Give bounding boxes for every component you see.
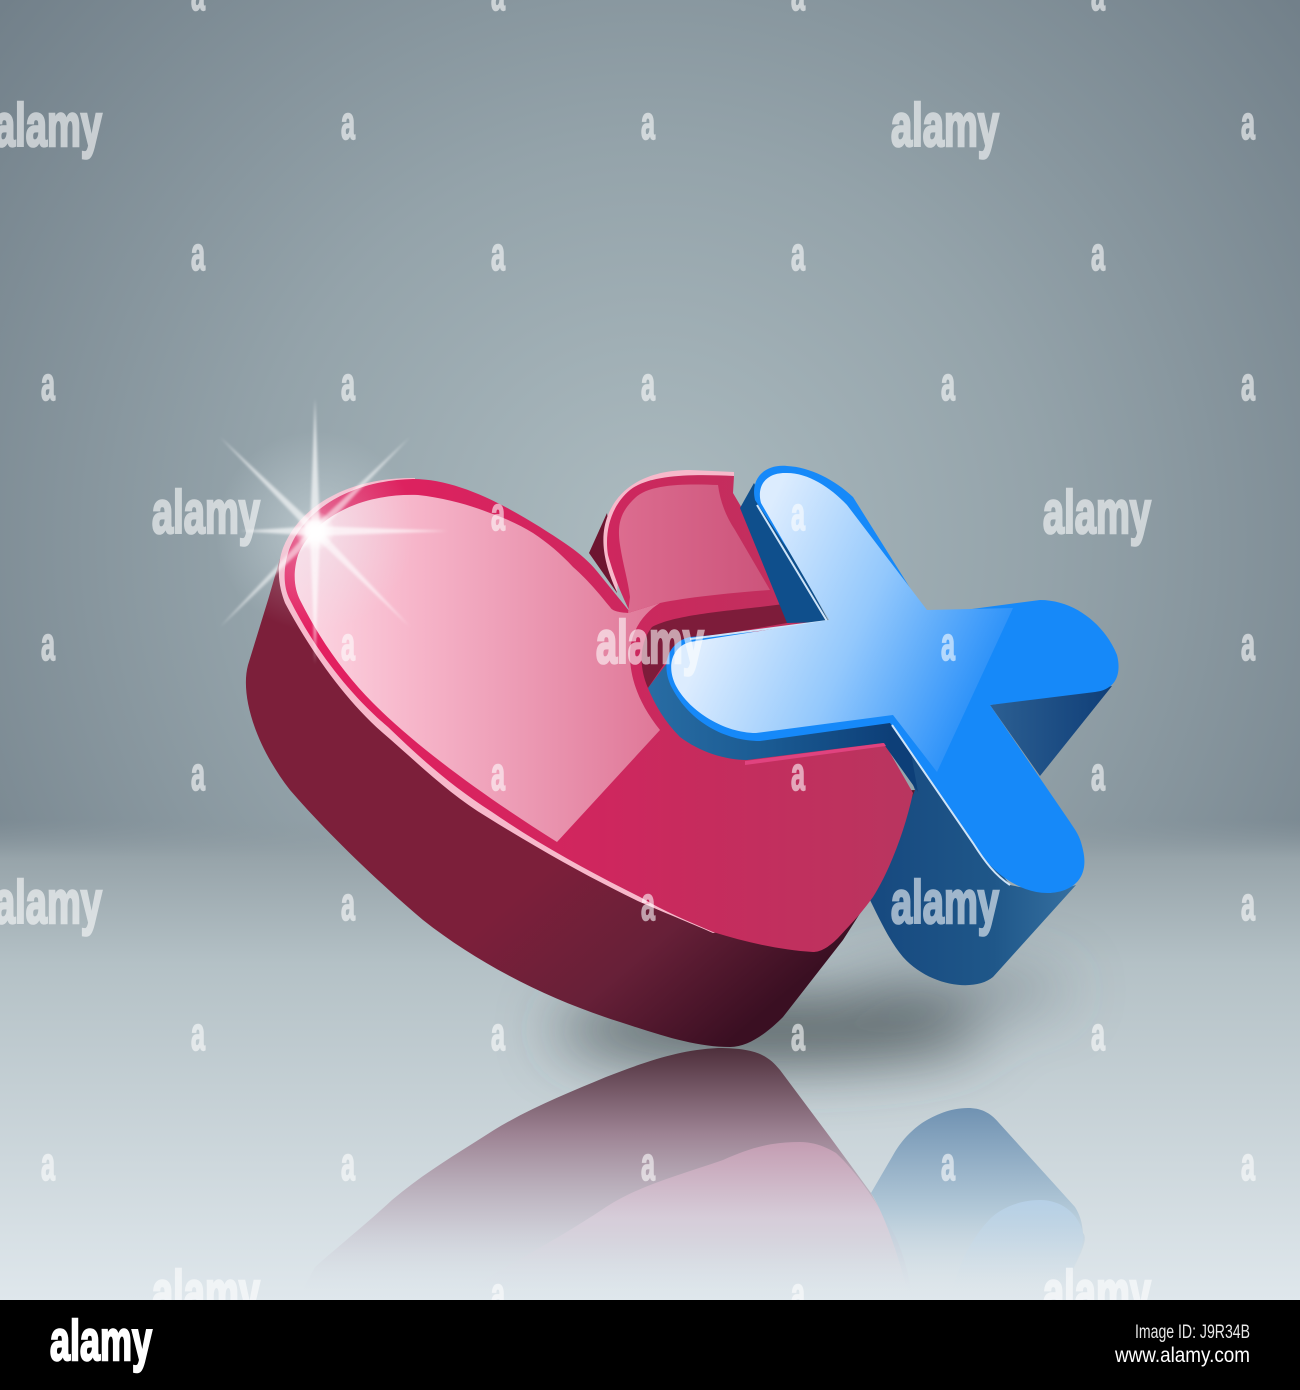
large watermark words: alamy: [891, 92, 999, 159]
small watermark marks: a: [1241, 877, 1255, 930]
small watermark marks: a: [791, 1267, 805, 1320]
small watermark marks: a: [341, 617, 355, 670]
small watermark marks: a: [641, 357, 655, 410]
small watermark marks: a: [341, 357, 355, 410]
small watermark marks: a: [791, 487, 805, 540]
cross back extrusion: [868, 686, 1112, 985]
small watermark marks: a: [1241, 96, 1255, 149]
heart lobe face: [619, 484, 770, 613]
small watermark marks: a: [641, 96, 655, 149]
heart pale rim: [279, 470, 734, 933]
large watermark words: alamy: [152, 479, 260, 546]
small watermark marks: a: [491, 1267, 505, 1320]
small watermark marks: a: [791, 227, 805, 280]
cross top face base: [666, 466, 1119, 893]
cross left arm side wall: [648, 663, 918, 792]
large watermark words: alamy: [1043, 1259, 1151, 1326]
contact shadow: [555, 970, 1070, 1062]
small watermark marks: a: [41, 357, 55, 410]
large watermark words: alamy: [1043, 479, 1151, 546]
small watermark marks: a: [341, 1137, 355, 1190]
small watermark marks: a: [491, 747, 505, 800]
cross right wedge wall: [990, 686, 1112, 776]
pink edge under the cross wall: [745, 743, 886, 765]
small watermark marks: a: [641, 1137, 655, 1190]
heart crimson top: [285, 475, 913, 952]
large watermark words: alamy: [891, 869, 999, 936]
heart: [246, 470, 915, 1047]
small watermark marks: a: [791, 1007, 805, 1060]
footer logo: alamy: [50, 1309, 152, 1373]
small watermark marks: a: [491, 227, 505, 280]
footer bar: [0, 1300, 1300, 1390]
small watermark marks: a: [791, 747, 805, 800]
heart side wall: [246, 552, 915, 1047]
small watermark marks: a: [941, 357, 955, 410]
cross pale edge: [690, 505, 1010, 885]
reflection of heart: [300, 1048, 912, 1295]
small watermark marks: a: [491, 487, 505, 540]
website: www.alamy.com: [1114, 1344, 1250, 1367]
reflection of cross: [871, 1108, 1085, 1295]
star glare: [215, 398, 448, 664]
small watermark marks: a: [341, 877, 355, 930]
cross glossy face: [671, 473, 1013, 772]
small watermark marks: a: [341, 96, 355, 149]
large watermark words: alamy: [152, 1259, 260, 1326]
small watermark marks: a: [1241, 1137, 1255, 1190]
small watermark marks: a: [41, 617, 55, 670]
heart glossy pink face: [295, 495, 660, 842]
cross: [648, 466, 1119, 893]
small watermark marks: a: [1241, 357, 1255, 410]
cross upper arm side wall: [740, 483, 829, 623]
small watermark marks: a: [941, 1137, 955, 1190]
reflective floor: [0, 820, 1300, 1300]
small watermark marks: a: [1241, 617, 1255, 670]
large watermark words: [0, 92, 1151, 1326]
small watermark marks: a: [641, 877, 655, 930]
heart cut inner wall: [642, 602, 797, 688]
small watermark marks: a: [491, 1007, 505, 1060]
small watermark marks: a: [191, 1007, 205, 1060]
large watermark words: alamy: [596, 609, 704, 676]
heart lobe back wall: [589, 513, 617, 593]
small watermark marks: a: [1091, 227, 1105, 280]
small watermark marks: a: [191, 227, 205, 280]
small watermark marks: a: [941, 617, 955, 670]
small watermark marks: a: [1091, 747, 1105, 800]
small watermark marks: a: [1091, 1007, 1105, 1060]
image id: Image ID: J9R34B: [1135, 1322, 1250, 1343]
small watermark marks: a: [191, 747, 205, 800]
small watermark marks: a: [41, 1137, 55, 1190]
